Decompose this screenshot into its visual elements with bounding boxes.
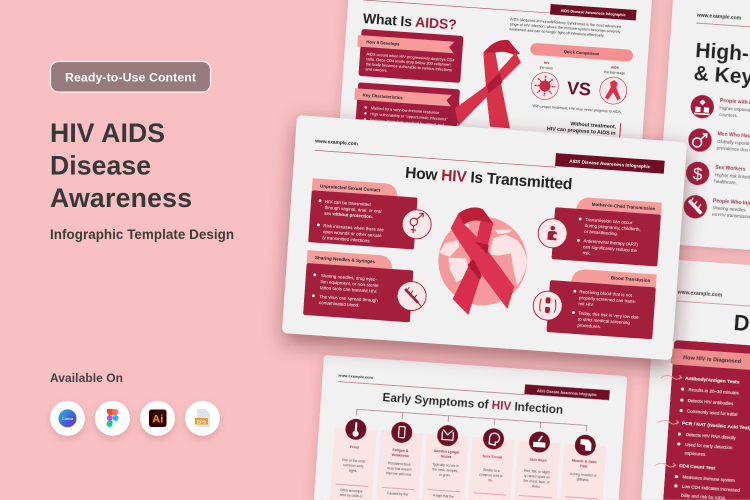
- panel: mother-to-child transmission: risk.: [582, 250, 591, 256]
- panel: unprotected sexual contact: through vaginal, anal, or oral: [324, 205, 382, 214]
- risk item: sex workers: [685, 161, 750, 189]
- icon: EPS file: [185, 401, 220, 436]
- website label: www.example.com: [695, 13, 742, 22]
- panel: unprotected sexual contact: HIV can be transmitted: [325, 199, 371, 207]
- card: skin rash: [514, 430, 561, 500]
- test list: CD4 Count Test: [679, 463, 716, 472]
- panel: mother-to-child transmission: Mother-to-Child Transmission: [592, 202, 656, 211]
- test list: Detects HIV antibodies: [687, 398, 734, 406]
- illustration: globe: [438, 217, 527, 305]
- test list: Antibody/Antigen Tests: [685, 376, 740, 386]
- card: muscle and joint pain: [560, 433, 607, 500]
- icon: EPS file: EPS: [197, 419, 206, 424]
- card: fever: Fever: [350, 445, 360, 450]
- icon: Figma: [95, 401, 130, 436]
- panel: mother-to-child transmission: or breastfeeding.: [584, 229, 618, 236]
- card: skin rash: the chest, face, or: [523, 479, 551, 485]
- risk item: sex workers: healthcare.: [714, 179, 737, 185]
- panel: mother-to-child transmission: Transmission can occur: [585, 217, 633, 225]
- slide: how HIV is transmitted: [282, 115, 687, 360]
- panel: mother-to-child transmission: Antiretroviral therapy (ART): [583, 238, 639, 247]
- panel: sharing needles and syringes: [303, 250, 429, 323]
- panel: blood transfusion: [531, 266, 657, 339]
- risk item: sex workers: Sex Workers: [715, 165, 746, 173]
- panel: blood transfusion: properly screened can trans-: [579, 295, 637, 304]
- heading: How HIV Is Transmitted: [405, 165, 573, 193]
- risk item: people with HIV partners: counters.: [719, 112, 738, 118]
- card: fever: Often accompa-: [340, 488, 363, 494]
- card: skin rash: Skin Rash: [530, 458, 547, 463]
- panel: blood transfusion: Today, this risk is very low due: [578, 311, 639, 320]
- panel: key characteristics: Requires immediate medical treatment and: [370, 117, 444, 127]
- panel: how it develops: and cancers.: [365, 66, 388, 73]
- panel: unprotected sexual contact: [308, 178, 434, 251]
- test list: [674, 376, 750, 500]
- main title: Awareness: [50, 183, 192, 213]
- comparison: HIV virus: the virus: [540, 65, 553, 70]
- website label: www.example.com: [676, 289, 723, 299]
- risk item: people who inject drugs: Sharing needles: [712, 205, 746, 213]
- panel: unprotected sexual contact: Risk increases when there are: [323, 223, 384, 232]
- card: muscle and joint pain: Muscle & Joint: [572, 459, 597, 464]
- test list: exposures.: [684, 450, 707, 457]
- panel: diagnosis methods: [661, 340, 750, 500]
- icon: Adobe Illustrator: [140, 401, 175, 436]
- card: fever: nied by chills or: [340, 493, 364, 499]
- main slide shadow: [283, 122, 688, 369]
- risk item: people who inject drugs: [683, 194, 750, 223]
- panel: mother-to-child transmission: can significantly reduce the: [583, 244, 638, 253]
- header tab: [524, 384, 610, 400]
- panel: sharing needles and syringes: Sharing needles, drug injec-: [321, 273, 377, 282]
- panel: how it develops: the body becomes vulnerable to various infections: [366, 61, 452, 72]
- card: muscle and joint pain: Pain: [580, 464, 588, 469]
- card: skin rash: ly raised spots on: [524, 474, 550, 480]
- panel: key characteristics: Marked by a very low immune response: [371, 105, 440, 115]
- arrow: antibody test: [661, 374, 682, 380]
- card: fever: signs.: [349, 469, 358, 473]
- callout: without treatment: Without treatment,: [570, 121, 617, 130]
- description: stage of HIV infection, where the immune system becomes severely: [510, 22, 621, 34]
- card: swollen lymph nodes: or groin.: [439, 473, 451, 478]
- card: swollen lymph nodes: Swollen Lymph: [434, 449, 459, 455]
- subtitle: Infographic Template Design: [50, 227, 234, 242]
- icon: blood bags: [532, 290, 563, 321]
- main title: Disease: [50, 150, 151, 180]
- card: fatigue: Caused by the: [387, 491, 408, 497]
- panel: sharing needles and syringes: tion equipment, or non-sterile: [320, 279, 379, 288]
- panel: key characteristics: [351, 82, 460, 149]
- comparison: HIV virus: HIV: [544, 61, 550, 65]
- panel: sharing needles and syringes: contaminated blood.: [319, 300, 360, 308]
- test list: Results in 20–30 minutes: [688, 387, 740, 396]
- panel: mother-to-child transmission: during pregnancy, childbirth,: [585, 223, 641, 232]
- panel: blood transfusion: mit HIV.: [578, 301, 594, 307]
- main title: HIV AIDS: [50, 118, 165, 148]
- illustration: awareness ribbon: [451, 207, 514, 315]
- comparison: AIDS ribbon: AIDS: [611, 65, 620, 70]
- card: skin rash: limbs.: [532, 484, 541, 489]
- test list: Detects HIV RNA directly: [686, 432, 737, 441]
- card: fever: common early: [343, 463, 364, 469]
- card: sore throat: common cold or: [479, 473, 504, 478]
- icon: syringe: [396, 281, 427, 312]
- card: fatigue: ness that doesn't: [387, 466, 412, 472]
- panel heading tag: [671, 348, 750, 375]
- arrow: CD4 test: [655, 462, 676, 467]
- available on label: Available On: [50, 371, 123, 385]
- panel: how it develops: AIDS occurs when HIV progressively destroys CD4: [366, 51, 456, 63]
- panel: how it develops: cells. Once CD4 levels drop below 200 cells/mm³,: [366, 56, 452, 67]
- icon: Canva: [50, 401, 85, 436]
- header tab: [550, 4, 637, 21]
- card: fatigue: improve with rest.: [386, 471, 412, 477]
- card: swollen lymph nodes: Nodes: [441, 454, 452, 459]
- heading: What Is AIDS?: [362, 10, 457, 33]
- slide: what is AIDS: [334, 0, 653, 221]
- card: fever: [330, 417, 378, 500]
- arrow: PCR test: [658, 419, 679, 425]
- test list: Commonly used for initial: [687, 408, 738, 417]
- icon: mother and child: [537, 218, 568, 249]
- comparison: AIDS ribbon: the late-stage: [604, 70, 625, 75]
- ribbon: AIDS: [455, 40, 521, 128]
- card: fatigue: Persistent tired-: [388, 461, 411, 467]
- slide: early symptoms: [314, 355, 627, 500]
- comparison pill: Quick Comparison: [564, 49, 600, 56]
- risk item: sex workers: $: [692, 164, 704, 184]
- header tab: [555, 153, 665, 174]
- note: With proper treatment, HIV may never progress to AIDS.: [532, 104, 622, 114]
- panel: blood transfusion: Receiving blood that is not: [579, 289, 633, 298]
- icon: Canva: Canva: [62, 416, 74, 421]
- card: fever: One of the most: [342, 458, 366, 464]
- panel: unprotected sexual contact: ly transmitted infections.: [322, 235, 371, 243]
- card: sore throat: flu.: [488, 478, 493, 483]
- panel: unprotected sexual contact: Unprotected Sexual Contact: [320, 183, 381, 193]
- card: swollen lymph nodes: Typically occurs in: [432, 462, 459, 468]
- versus label: VS: [566, 78, 592, 100]
- header tab: AIDS Disease Awareness Infographic: [561, 9, 626, 17]
- icon: gender symbols: [401, 209, 432, 240]
- card: fatigue: Weakness: [392, 453, 409, 458]
- slide: how HIV is diagnosed: [641, 259, 750, 500]
- risk item: people with HIV partners: [690, 94, 750, 124]
- header tab: AIDS Disease Awareness Infographic: [537, 389, 597, 397]
- panel: sharing needles and syringes: Sharing Needles & Syringes: [315, 255, 376, 264]
- icon: Adobe Illustrator: Ai: [152, 414, 163, 426]
- header tab: AIDS Disease Awareness Infographic: [569, 159, 651, 169]
- callout: without treatment: [547, 118, 621, 139]
- card: sore throat: Sore Throat: [482, 454, 503, 460]
- card: swollen lymph nodes: [422, 424, 469, 500]
- badge: ready-to-use content: [50, 62, 210, 92]
- card: sore throat: [468, 427, 515, 500]
- panel: unprotected sexual contact: sex without protection.: [324, 211, 373, 219]
- card: skin rash: Red, flat, or slight-: [524, 469, 551, 475]
- badge: ready-to-use content: Ready-to-Use Content: [65, 70, 196, 84]
- card: fatigue: Fatigue &: [392, 448, 409, 453]
- card: muscle and joint pain: Aching muscles or: [570, 472, 598, 478]
- heading: [693, 39, 750, 93]
- description: weakened and can no longer fight off infections effectively.: [509, 27, 604, 38]
- comparison: HIV virus: [531, 60, 560, 100]
- test list: Used for early detection: [685, 442, 733, 450]
- risk item: men who have sex with men: [688, 128, 750, 156]
- panel: sharing needles and syringes: tattoo tools can transmit HIV.: [320, 285, 377, 294]
- panel: key characteristics: High vulnerability to "opportunistic infections": [370, 111, 448, 122]
- slide: high-risk groups: [656, 0, 750, 266]
- website label: www.example.com: [314, 138, 358, 147]
- test list: PCR / NAT (Nucleic Acid Test): [682, 420, 750, 431]
- connector: [356, 409, 587, 431]
- card: fatigue: [376, 420, 423, 500]
- description: [509, 17, 621, 39]
- panel: mother-to-child transmission: [536, 194, 662, 267]
- card: swollen lymph nodes: the neck, armpits,: [432, 467, 458, 473]
- panel: how it develops: [355, 29, 463, 83]
- panel: blood transfusion: to strict medical screening: [578, 317, 631, 325]
- panel: sharing needles and syringes: The virus can spread through: [319, 294, 378, 303]
- panel heading tag: How HIV is Diagnosed: [683, 355, 741, 365]
- card: sore throat: Similar to a: [483, 468, 500, 473]
- heading: Early Symptoms of HIV Infection: [382, 390, 564, 417]
- panel: blood transfusion: Blood Transfusion: [611, 275, 651, 283]
- comparison: AIDS ribbon: [599, 65, 629, 105]
- tag: How It Develops: [366, 39, 400, 47]
- tag: Key Characteristics: [362, 92, 403, 100]
- test list: Low CD4 indicates increased: [682, 484, 741, 493]
- card: swollen lymph nodes: A sign that the: [433, 493, 454, 499]
- card: muscle and joint pain: stiffness.: [576, 477, 590, 482]
- panel: unprotected sexual contact: open wounds or other sexual-: [323, 229, 383, 238]
- panel: blood transfusion: procedures.: [577, 323, 601, 329]
- test list: Measures immune system: [682, 475, 735, 483]
- main title: [50, 118, 192, 213]
- description: AIDS (Acquired Immunodeficiency Syndrome) is the most advanced: [510, 17, 621, 29]
- callout: without treatment: HIV can progress to AIDS in: [547, 126, 616, 137]
- comparison pill: [530, 43, 633, 62]
- website label: www.example.com: [337, 373, 374, 380]
